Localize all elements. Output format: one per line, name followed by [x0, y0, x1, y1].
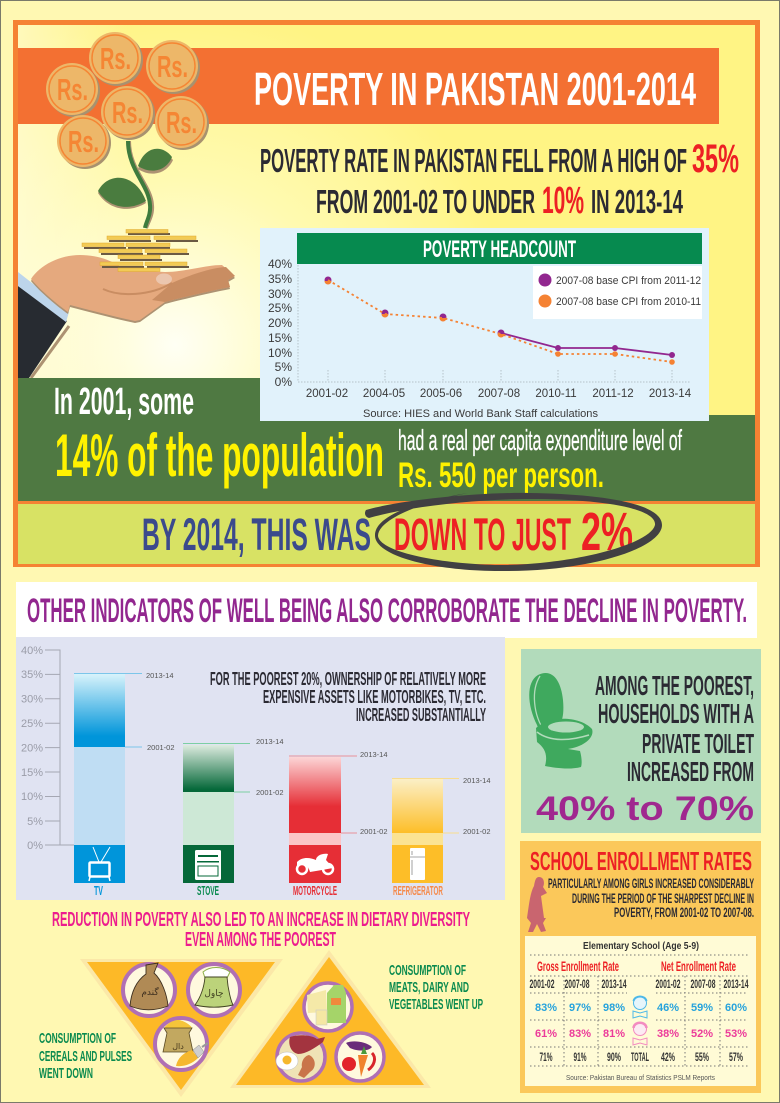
legend	[533, 266, 702, 319]
y axis: 25%	[21, 718, 43, 730]
icon: vegetables	[336, 1033, 384, 1081]
coins	[46, 32, 209, 169]
legend: 2007-08 base CPI from 2011-12	[556, 275, 701, 287]
total row: 91%	[574, 1052, 586, 1064]
bar: refrigerator	[392, 776, 491, 898]
y axis: 10%	[21, 791, 43, 803]
y axis labels: 20%	[268, 316, 292, 330]
asset description: EXPENSIVE ASSETS LIKE MOTORBIKES, TV, ETC.	[263, 687, 486, 707]
coins: Rs.	[166, 105, 197, 140]
y axis	[21, 645, 74, 852]
coins: Rs.	[68, 124, 99, 159]
bar: motorcycle: 2013-14	[360, 750, 388, 759]
callout: by 2014	[18, 493, 755, 571]
school description	[548, 876, 754, 920]
triangle: meats, dairy, vegetables	[230, 950, 431, 1088]
icon: motorcycle	[297, 854, 333, 874]
y axis labels: 10%	[268, 346, 292, 360]
bar: tv: 2013-14	[146, 671, 174, 680]
coins: Rs.	[112, 95, 143, 130]
bar: motorcycle: MOTORCYCLE	[293, 883, 337, 898]
bar: refrigerator: REFRIGERATOR	[393, 883, 443, 898]
triangle: cereals and pulses	[80, 959, 283, 1097]
text: population statistic: 14% of the population	[55, 422, 384, 489]
total row: 42%	[661, 1052, 675, 1064]
chart: poverty headcount	[260, 228, 709, 421]
year headers	[530, 979, 749, 991]
bar: refrigerator: 2001-02	[463, 827, 491, 836]
text: cereals went down: CONSUMPTION OF	[39, 1030, 116, 1047]
icon: toilet	[529, 673, 592, 769]
y axis: 0%	[27, 840, 43, 852]
hand	[31, 255, 235, 323]
x axis labels: 2011-12	[592, 388, 634, 400]
toilet text	[595, 670, 754, 787]
y axis: 15%	[21, 767, 43, 779]
asset description: FOR THE POOREST 20%, OWNERSHIP OF RELATIVELY MORE	[210, 669, 486, 689]
icon: meat and egg	[276, 1033, 325, 1081]
coins: Rs.	[157, 49, 188, 84]
girls row	[535, 1028, 747, 1040]
text: cereals went down: WENT DOWN	[39, 1065, 93, 1082]
panel: asset ownership	[16, 637, 505, 900]
panel: school enrollment	[520, 841, 761, 1093]
year headers: 2007-08	[690, 979, 716, 991]
icon: lentil sack: دال	[172, 1042, 184, 1051]
y axis labels: 5%	[275, 360, 292, 374]
x axis labels: 2004-05	[363, 388, 405, 400]
bar: tv	[74, 671, 175, 898]
icon: stove	[195, 850, 221, 880]
y axis labels: 35%	[268, 272, 292, 286]
hand-drawn ellipse	[365, 493, 662, 571]
y axis labels: 15%	[268, 331, 292, 345]
headline text: 35%	[692, 137, 739, 181]
legend: 2007-08 base CPI from 2010-11	[556, 296, 701, 308]
headline text	[260, 137, 739, 222]
boys row: 98%	[603, 1002, 625, 1014]
sleeve	[18, 272, 69, 378]
coins: Rs.	[57, 72, 88, 107]
title banner	[18, 48, 719, 124]
boys row	[535, 1002, 747, 1014]
bar: stove	[183, 737, 284, 898]
text: meats went up: CONSUMPTION OF	[389, 962, 466, 979]
callout: by 2014: BY 2014, THIS WAS	[142, 509, 371, 560]
plant stem and leaves	[98, 141, 173, 228]
total row	[540, 1052, 743, 1064]
icon: wheat sack	[123, 963, 175, 1016]
x axis labels: 2007-08	[478, 388, 520, 400]
text: population statistic	[54, 381, 683, 495]
headline text: 10%	[542, 180, 584, 222]
text: cereals went down: CEREALS AND PULSES	[39, 1048, 132, 1065]
girls row: 52%	[691, 1028, 713, 1040]
y axis labels: 40%	[268, 257, 292, 271]
enrollment table	[525, 936, 756, 1086]
y axis labels: 30%	[268, 287, 292, 301]
total row: 90%	[607, 1052, 621, 1064]
panel: poverty overview	[16, 22, 758, 571]
boys row: 97%	[569, 1002, 591, 1014]
heading: dietary diversity: EVEN AMONG THE POOREST	[185, 929, 336, 951]
asset description: INCREASED SUBSTANTIALLY	[356, 705, 486, 725]
text: meats went up: MEATS, DAIRY AND	[389, 979, 469, 996]
icon: rice sack: چاول	[204, 989, 224, 999]
girls row: 61%	[535, 1028, 557, 1040]
coins: Rs.	[100, 41, 131, 76]
year headers: 2013-14	[602, 979, 627, 991]
total row: 57%	[729, 1052, 743, 1064]
icon: lentil sack	[155, 1018, 208, 1070]
total row: TOTAL	[631, 1052, 649, 1064]
headline text: FROM 2001-02 TO UNDER	[316, 183, 535, 220]
toilet statistic: 40% to 70%	[536, 790, 754, 828]
boys row: 83%	[535, 1002, 557, 1014]
boys row: 59%	[691, 1002, 713, 1014]
text: meats went up	[389, 962, 483, 1013]
bar: stove: 2001-02	[256, 788, 284, 797]
x axis labels: 2013-14	[649, 388, 692, 400]
total row: 55%	[695, 1052, 709, 1064]
x axis labels: 2001-02	[306, 388, 348, 400]
icon: hand holding money plant	[18, 32, 235, 378]
girls row: 81%	[603, 1028, 625, 1040]
chart title: POVERTY HEADCOUNT	[423, 236, 576, 263]
icon: dairy	[304, 983, 352, 1031]
icon: boy	[633, 996, 647, 1018]
text: population statistic: Rs. 550 per person.	[398, 456, 604, 495]
table source: Source: Pakistan Bureau of Statistics PSLM Reports	[566, 1073, 715, 1082]
icon: woman silhouette	[527, 877, 547, 932]
chart title	[297, 233, 702, 264]
heading: dietary diversity	[52, 909, 470, 951]
y axis labels: 0%	[275, 375, 292, 389]
heading: other indicators	[16, 582, 757, 638]
girls row: 83%	[569, 1028, 591, 1040]
total row: 71%	[540, 1052, 552, 1064]
bar: refrigerator: 2013-14	[463, 776, 491, 785]
callout: by 2014: DOWN TO JUST	[394, 509, 571, 560]
panel: private toilet	[521, 649, 761, 833]
purple series	[324, 276, 675, 358]
bar: tv: TV	[94, 883, 103, 898]
icon: rice sack	[188, 964, 240, 1016]
x axis labels	[306, 388, 692, 400]
y axis: 35%	[21, 669, 43, 681]
boys row: 46%	[657, 1002, 679, 1014]
icon: television	[89, 847, 110, 881]
year headers: 2007-08	[564, 979, 590, 991]
asset description	[210, 669, 486, 725]
coin stack	[82, 230, 198, 272]
girls row: 53%	[725, 1028, 747, 1040]
headline text: IN 2013-14	[591, 183, 683, 220]
y axis labels	[268, 257, 292, 389]
bar: motorcycle: 2001-02	[360, 827, 388, 836]
icon: refrigerator	[410, 848, 425, 880]
y axis: 30%	[21, 694, 43, 706]
text: meats went up: VEGETABLES WENT UP	[389, 996, 483, 1013]
x axis labels: 2005-06	[420, 388, 462, 400]
bar: stove: 2013-14	[256, 737, 284, 746]
y axis labels: 25%	[268, 301, 292, 315]
year headers: 2001-02	[656, 979, 680, 991]
girls row: 38%	[657, 1028, 679, 1040]
x axis labels: 2010-11	[535, 388, 577, 400]
text: population statistic: In 2001, some	[54, 381, 194, 423]
boys row: 60%	[725, 1002, 747, 1014]
enrollment table: Elementary School (Age 5-9)	[583, 941, 699, 952]
y axis: 5%	[27, 816, 43, 828]
bar: stove: STOVE	[197, 883, 219, 898]
orange series	[324, 280, 675, 365]
bar: motorcycle	[289, 750, 388, 898]
icon: wheat sack: گندم	[141, 986, 159, 998]
bar: tv: 2001-02	[147, 743, 175, 752]
green band	[18, 378, 755, 501]
year headers: 2001-02	[530, 979, 554, 991]
gross and net headers: Gross Enrollment Rate	[537, 958, 619, 974]
year headers: 2013-14	[724, 979, 749, 991]
y axis: 40%	[21, 645, 43, 657]
chart source: Source: HIES and World Bank Staff calculations	[363, 408, 598, 420]
text: cereals went down	[39, 1030, 132, 1082]
y axis: 20%	[21, 742, 43, 754]
icon: girl	[633, 1022, 647, 1045]
callout: by 2014: 2%	[581, 502, 633, 562]
